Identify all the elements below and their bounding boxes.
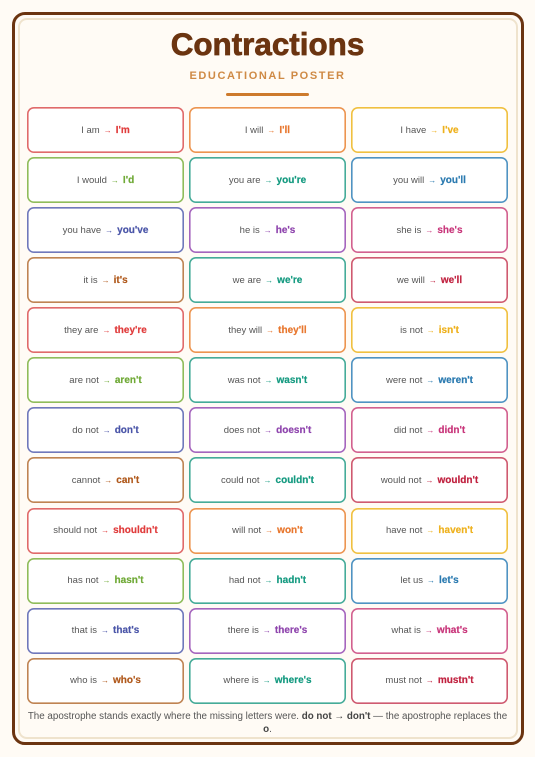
card: do not: → — [103, 426, 111, 434]
card: had not: → — [265, 576, 273, 585]
card: will not: won't — [277, 525, 303, 536]
card: they will: they'll — [278, 324, 307, 336]
card: you are — [189, 157, 346, 203]
card: cannot: → — [104, 476, 112, 484]
card: should not: shouldn't — [113, 525, 158, 536]
card: must not — [351, 658, 508, 704]
card: I would: → — [111, 176, 119, 184]
card: where is: where is — [223, 675, 259, 686]
card: had not: hadn't — [277, 575, 306, 586]
card: I will: I'll — [279, 124, 290, 136]
card: you have — [27, 207, 184, 253]
card: we are: we are — [233, 274, 261, 286]
card: I will: → — [267, 126, 275, 134]
card: did not — [351, 407, 508, 453]
card: I am: I'm — [116, 124, 130, 136]
card: who is: who is — [70, 675, 97, 686]
card: you have: you've — [117, 224, 148, 236]
card: that is: → — [101, 626, 109, 635]
footer note — [28, 711, 507, 735]
title underline — [226, 92, 309, 96]
card: we will: → — [429, 276, 437, 284]
card: he is — [189, 207, 346, 253]
card: you have: → — [105, 226, 113, 234]
title: Contractions — [171, 27, 364, 62]
card: it is: it is — [83, 274, 98, 286]
card: do not: do not — [72, 424, 99, 436]
card: does not — [189, 407, 346, 453]
card: cannot: cannot — [72, 474, 100, 486]
card: I will: I will — [245, 124, 263, 136]
card: they are: they're — [114, 324, 147, 336]
card: it is — [27, 257, 184, 303]
card: will not: will not — [232, 525, 261, 536]
card: she is: → — [425, 226, 433, 234]
card: where is: → — [263, 676, 271, 685]
card: was not: was not — [228, 374, 261, 386]
card: had not — [189, 558, 346, 604]
card: did not: didn't — [438, 424, 465, 436]
card: does not: doesn't — [276, 424, 311, 436]
card: she is — [351, 207, 508, 253]
card: would not — [351, 457, 508, 503]
card: has not: has not — [67, 575, 99, 586]
card: does not: does not — [224, 424, 260, 436]
card: was not: → — [265, 376, 273, 384]
card: they will — [189, 307, 346, 353]
card: should not — [27, 508, 184, 554]
card: would not: would not — [381, 474, 421, 486]
card: she is: she is — [396, 224, 421, 236]
card: you will: you will — [393, 174, 424, 186]
card: had not: had not — [229, 575, 261, 586]
card: cannot — [27, 457, 184, 503]
card: who is — [27, 658, 184, 704]
card: could not: couldn't — [276, 474, 314, 486]
card: did not: → — [426, 426, 434, 434]
card: that is — [27, 608, 184, 654]
card: I will — [189, 107, 346, 153]
card: I would: I would — [77, 174, 107, 186]
footer note: The apostrophe stands exactly where the missing letters were. do not → don't — the apostrophe replaces the — [28, 711, 507, 722]
card: cannot: can't — [116, 474, 139, 486]
card: are not: → — [103, 376, 111, 384]
card: we will — [351, 257, 508, 303]
card: what is — [351, 608, 508, 654]
card: we will: we will — [397, 274, 425, 286]
card: was not: wasn't — [277, 374, 307, 386]
card: who is: who's — [113, 675, 141, 686]
card: they will: → — [266, 326, 274, 334]
card: were not: weren't — [438, 374, 473, 386]
card: I have: I have — [400, 124, 426, 136]
card: they are — [27, 307, 184, 353]
card: she is: she's — [437, 224, 462, 236]
card: I have: I've — [442, 124, 459, 136]
card: they are: they are — [64, 324, 98, 336]
card: could not — [189, 457, 346, 503]
card: has not: → — [103, 576, 111, 585]
card: are not: are not — [69, 374, 99, 386]
card: were not — [351, 357, 508, 403]
card: it is: → — [102, 276, 110, 284]
card: you are: you're — [277, 174, 306, 186]
card: there is: → — [263, 626, 271, 635]
card: what is: what is — [391, 625, 421, 636]
card: should not: should not — [53, 525, 97, 536]
card: are not — [27, 357, 184, 403]
card: you are: you are — [229, 174, 261, 186]
card: we will: we'll — [441, 274, 462, 286]
card: is not — [351, 307, 508, 353]
card: are not: aren't — [115, 374, 142, 386]
card: we are: → — [265, 276, 273, 284]
card: what is: what's — [437, 625, 468, 636]
card: you will: → — [428, 176, 436, 184]
card: will not — [189, 508, 346, 554]
card: has not: hasn't — [115, 575, 144, 586]
card: let us — [351, 558, 508, 604]
card: it is: it's — [114, 274, 128, 286]
card: should not: → — [101, 526, 109, 535]
card: there is — [189, 608, 346, 654]
card: would not: → — [425, 476, 433, 484]
card: you are: → — [265, 176, 273, 184]
card: that is: that is — [72, 625, 97, 636]
card: have not: → — [426, 526, 434, 535]
card: he is: he's — [276, 224, 295, 236]
card: does not: → — [264, 426, 272, 434]
card: must not: mustn't — [438, 675, 474, 686]
card: do not — [27, 407, 184, 453]
card: we are: we're — [277, 274, 302, 286]
card: I have — [351, 107, 508, 153]
card: is not: → — [427, 326, 435, 334]
card: will not: → — [265, 526, 273, 535]
card: is not: is not — [400, 324, 423, 336]
card: I would: I'd — [123, 174, 134, 186]
card: I am: → — [104, 126, 112, 134]
card: there is: there is — [228, 625, 259, 636]
card: let us: let us — [400, 575, 423, 586]
card: have not: have not — [386, 525, 422, 536]
card: he is: → — [264, 226, 272, 234]
card: have not — [351, 508, 508, 554]
card: let us: → — [427, 576, 435, 585]
card: where is — [189, 658, 346, 704]
card: there is: there's — [275, 625, 307, 636]
card: you will — [351, 157, 508, 203]
card: that is: that's — [113, 625, 139, 636]
card: could not: → — [264, 476, 272, 484]
card: must not: → — [426, 676, 434, 685]
card: is not: isn't — [439, 324, 459, 336]
subtitle: EDUCATIONAL POSTER — [189, 70, 346, 82]
card: we are — [189, 257, 346, 303]
card: he is: he is — [240, 224, 260, 236]
card: they are: → — [102, 326, 110, 334]
card: do not: don't — [115, 424, 139, 436]
card: have not: haven't — [438, 525, 473, 536]
card: was not — [189, 357, 346, 403]
card: did not: did not — [394, 424, 422, 436]
card: where is: where's — [275, 675, 312, 686]
card: what is: → — [425, 626, 433, 635]
card: must not: must not — [385, 675, 422, 686]
card: they will: they will — [228, 324, 262, 336]
card: would not: wouldn't — [437, 474, 478, 486]
card: you will: you'll — [440, 174, 466, 186]
card: I would — [27, 157, 184, 203]
card: you have: you have — [63, 224, 101, 236]
card: I have: → — [430, 126, 438, 134]
card: who is: → — [101, 676, 109, 685]
card: has not — [27, 558, 184, 604]
footer note: o. — [263, 724, 272, 735]
card: could not: could not — [221, 474, 260, 486]
card: were not: were not — [386, 374, 422, 386]
card: I am: I am — [81, 124, 100, 136]
card: I am — [27, 107, 184, 153]
card: were not: → — [426, 376, 434, 384]
card: let us: let's — [439, 575, 459, 586]
